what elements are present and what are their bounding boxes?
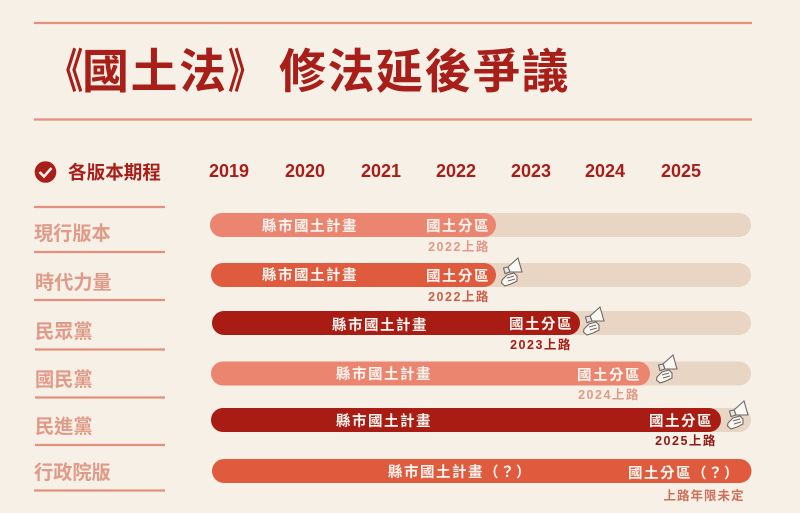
row labels: 國民黨 <box>35 369 93 391</box>
row: 現行版本: 2022上路 <box>428 239 490 254</box>
row: 國民黨 <box>211 355 751 402</box>
year axis: 2025 <box>661 161 701 181</box>
row: 行政院版 <box>212 459 752 503</box>
row: 民進黨: 國土分區 <box>649 413 713 430</box>
row: 民眾黨 <box>212 307 751 352</box>
year axis: 2019 <box>209 161 249 181</box>
icon: megaphone <box>656 355 677 383</box>
title block: 修法延後爭議 <box>279 45 570 98</box>
year axis: 2021 <box>361 161 401 181</box>
header: schedule label with check icon: 各版本期程 <box>68 162 161 183</box>
row: 現行版本: 國土分區 <box>426 218 490 235</box>
title block: 》 <box>228 46 262 98</box>
row labels: 民眾黨 <box>35 321 93 343</box>
year axis <box>209 161 701 181</box>
row: 民進黨: 2025上路 <box>655 433 717 448</box>
row labels: 行政院版 <box>34 461 111 484</box>
row: 時代力量: 2022上路 <box>428 289 490 304</box>
icon: megaphone <box>728 401 748 429</box>
row: 行政院版: 國土分區（？） <box>628 465 740 482</box>
year axis: 2022 <box>436 161 476 181</box>
row: 民眾黨: 國土分區 <box>509 316 573 333</box>
row: 行政院版: 上路年限未定 <box>663 488 745 503</box>
row labels: 現行版本 <box>34 223 111 245</box>
row: 現行版本 <box>210 213 751 254</box>
row labels <box>34 207 165 490</box>
icon: megaphone <box>584 307 604 335</box>
title block: 《 <box>48 45 83 98</box>
row: 時代力量: 縣市國土計畫 <box>262 266 358 284</box>
row: 國民黨: 2024上路 <box>578 387 640 402</box>
row: 時代力量 <box>211 258 751 304</box>
year axis: 2020 <box>285 161 325 181</box>
year axis: 2023 <box>511 161 551 181</box>
row: 現行版本: 縣市國土計畫 <box>262 217 358 235</box>
icon: megaphone <box>502 258 522 286</box>
title block: 國土法 <box>82 45 228 98</box>
row: 民進黨 <box>211 401 751 448</box>
row: 民眾黨: 2023上路 <box>510 337 572 352</box>
row labels: 時代力量 <box>35 272 112 294</box>
row: 行政院版: 縣市國土計畫（？） <box>388 463 532 481</box>
row: 國民黨: 國土分區 <box>577 367 641 384</box>
year axis: 2024 <box>585 161 625 181</box>
row labels: 民進黨 <box>35 416 93 438</box>
row: 國民黨: 縣市國土計畫 <box>336 365 432 383</box>
row: 時代力量: 國土分區 <box>426 268 490 285</box>
row: 民眾黨: 縣市國土計畫 <box>332 316 428 334</box>
title block <box>34 23 752 120</box>
row: 民進黨: 縣市國土計畫 <box>336 412 432 430</box>
